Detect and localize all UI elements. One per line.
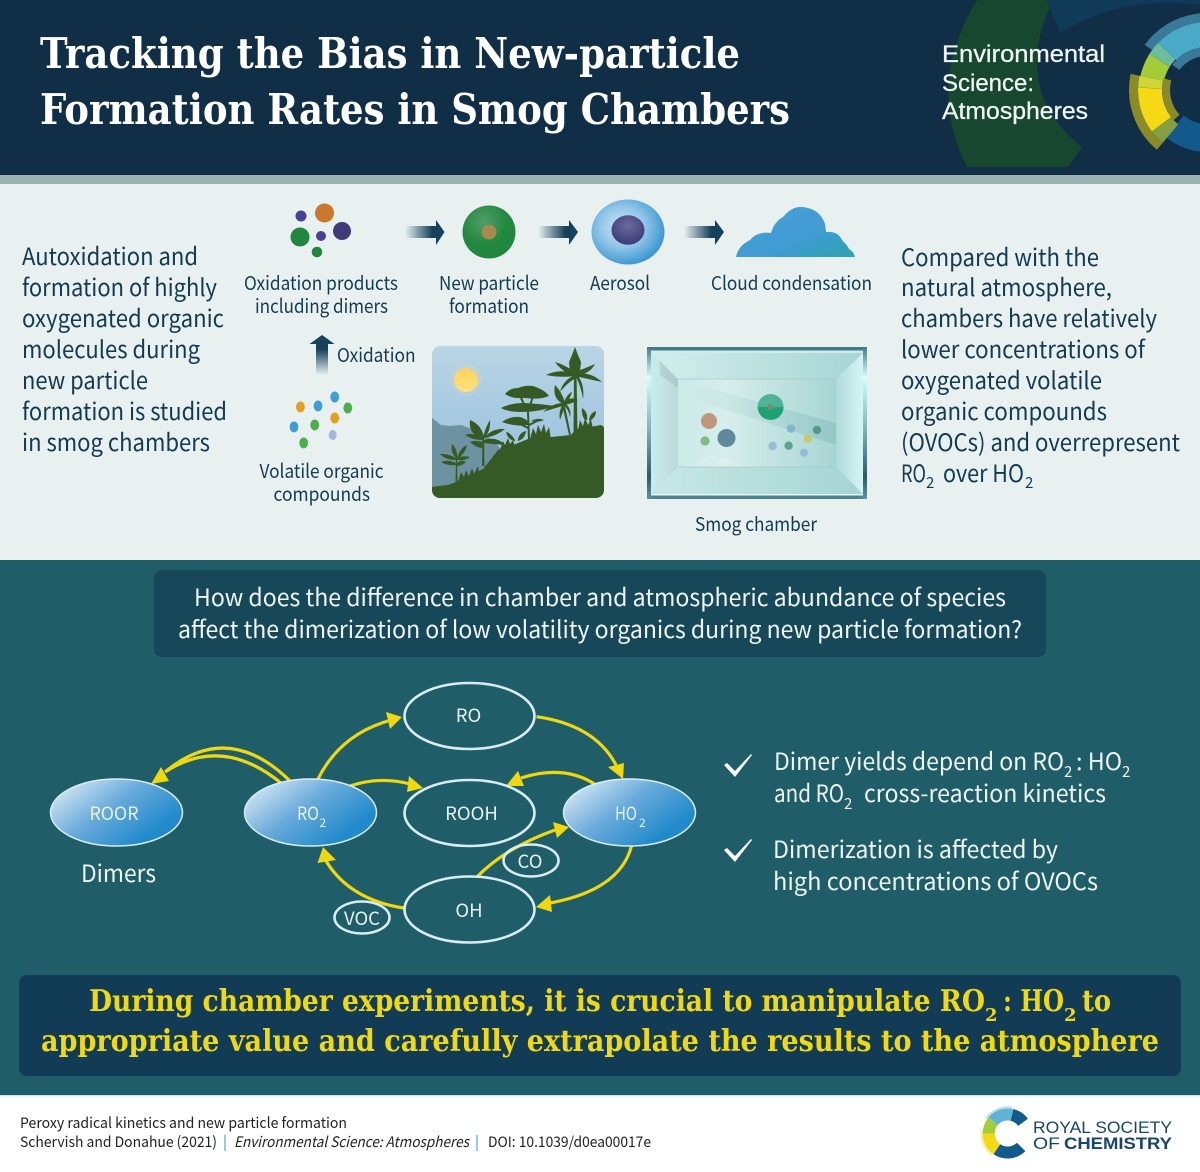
journal name: Environmental	[942, 41, 1105, 68]
node: RO2: 2	[320, 814, 326, 831]
icon: new particle	[462, 206, 516, 258]
title: Tracking the Bias in New-particle	[40, 29, 740, 78]
icon: volatile organic compounds	[290, 392, 352, 448]
left text block: molecules during	[22, 330, 200, 365]
conclusion box: During chamber experiments, it is crucial to manipulate RO	[89, 984, 985, 1019]
conclusion box: to	[1082, 984, 1111, 1019]
finding 1: cross-reaction kinetics	[864, 774, 1106, 809]
arrow: RO to HO2	[536, 717, 624, 779]
icon: check mark	[724, 754, 752, 777]
flow labels: Aerosol	[590, 269, 650, 296]
right text block: 2	[1025, 472, 1033, 493]
oxidation label: Oxidation	[337, 341, 416, 368]
arrow: OH to RO2	[318, 847, 404, 908]
finding 2: high concentrations of OVOCs	[773, 862, 1098, 897]
ground and vegetation	[432, 347, 604, 498]
citation: Environmental Science: Atmospheres	[234, 1131, 470, 1152]
reaction network diagram	[50, 683, 696, 942]
arrow: oxidation	[310, 335, 334, 375]
flow labels: Cloud condensation	[711, 269, 872, 296]
citation: Peroxy radical kinetics and new particle formation	[20, 1112, 347, 1133]
conclusion box: 2	[985, 1005, 998, 1026]
arrow: RO2 to ROOH	[350, 776, 423, 792]
left text block: new particle	[22, 361, 148, 396]
node: RO2	[244, 779, 376, 846]
right text block: Compared with the	[901, 238, 1099, 273]
node: ROOR	[50, 779, 182, 846]
node: CO	[504, 844, 558, 876]
voc label	[260, 457, 384, 507]
journal name: Science:	[942, 70, 1034, 97]
node: ROOH: ROOH	[445, 800, 498, 826]
node: OH	[404, 876, 534, 942]
header band	[0, 0, 1200, 194]
right text block	[901, 238, 1180, 493]
voc label: Volatile organic	[260, 457, 384, 484]
question box	[154, 570, 1046, 657]
node: HO2: 2	[639, 814, 646, 831]
right text block: organic compounds	[901, 392, 1107, 427]
flow labels: New particle	[439, 269, 539, 296]
citation: |	[223, 1131, 227, 1152]
node: CO: CO	[518, 848, 542, 874]
citation: |	[475, 1131, 479, 1152]
finding 2	[724, 830, 1098, 897]
right text block: lower concentrations of	[901, 330, 1146, 365]
node: ROOH	[404, 780, 534, 846]
panel: dimerization question and mechanism	[0, 560, 1200, 1095]
left text block: in smog chambers	[22, 423, 210, 458]
node: RO: RO	[456, 702, 481, 728]
arrow: RO2 to RO	[318, 712, 402, 779]
finding 1: 2	[1122, 761, 1130, 782]
finding 1	[724, 742, 1130, 814]
icon: aerosol	[592, 200, 664, 264]
decorative logo arcs	[948, 0, 1200, 167]
right text block: RO	[901, 454, 926, 489]
icon: Royal Society of Chemistry logo: OF	[1033, 1135, 1060, 1153]
flow labels: Oxidation products	[244, 269, 398, 296]
left text block: formation is studied	[22, 392, 227, 427]
left text block: Autoxidation and	[22, 237, 198, 272]
journal name	[942, 41, 1105, 125]
left text block: formation of highly	[22, 268, 217, 303]
right text block: natural atmosphere,	[901, 268, 1112, 303]
arrow: HO2 to OH	[536, 846, 632, 912]
icon: Royal Society of Chemistry logo: CHEMISTRY	[1064, 1135, 1172, 1153]
icon: cloud	[736, 207, 855, 257]
dimers label: Dimers	[81, 854, 156, 889]
right text block: oxygenated volatile	[901, 361, 1102, 396]
right text block: (OVOCs) and overrepresent	[901, 423, 1180, 458]
title	[40, 29, 790, 134]
arrow: RO2 to ROOR	[151, 748, 290, 784]
panel: atmosphere and chamber overview	[0, 184, 1200, 560]
voc label: compounds	[274, 480, 370, 507]
node: OH: OH	[455, 897, 483, 923]
hills	[432, 418, 500, 498]
finding 2: Dimerization is affected by	[773, 830, 1058, 865]
left text block	[22, 237, 227, 458]
citation	[20, 1112, 651, 1152]
finding 1: 2	[844, 793, 852, 814]
right text block: 2	[926, 472, 934, 493]
node: RO	[404, 683, 534, 749]
icon: Royal Society of Chemistry logo: ROYAL SOCIETY	[1033, 1119, 1172, 1137]
node: HO2: HO	[615, 800, 637, 826]
icon: oxidation product molecules	[290, 204, 351, 257]
left text block: oxygenated organic	[22, 299, 224, 334]
title: Formation Rates in Smog Chambers	[40, 85, 790, 134]
finding 1: Dimer yields depend on RO	[774, 742, 1064, 777]
arrow: aerosol to cloud	[684, 220, 724, 245]
smog chamber label: Smog chamber	[695, 510, 818, 537]
finding 1: : HO	[1076, 742, 1122, 777]
right text block: chambers have relatively	[901, 299, 1157, 334]
node: VOC	[334, 902, 390, 934]
flow labels: formation	[449, 292, 529, 319]
question box: affect the dimerization of low volatility organics during new particle formation?	[178, 610, 1022, 645]
citation: Schervish and Donahue (2021)	[20, 1131, 217, 1152]
node: HO2	[564, 779, 696, 846]
finding 1: and RO	[774, 774, 844, 809]
right text block: over HO	[943, 454, 1024, 489]
flow labels	[244, 269, 872, 319]
arrow: new particle to aerosol	[538, 220, 578, 245]
conclusion box	[19, 975, 1181, 1076]
question box: How does the difference in chamber and atmospheric abundance of species	[194, 578, 1006, 613]
citation: DOI: 10.1039/d0ea00017e	[488, 1131, 651, 1152]
illustration: rainforest atmosphere	[432, 346, 604, 498]
illustration: smog chamber	[647, 347, 867, 499]
node: VOC: VOC	[344, 905, 380, 931]
node: RO2: RO	[297, 800, 319, 826]
chamber particles	[700, 394, 821, 457]
conclusion box: 2	[1064, 1005, 1077, 1026]
arrow: products to new particle	[405, 220, 444, 245]
journal name: Atmospheres	[942, 98, 1088, 125]
flow labels: including dimers	[255, 292, 388, 319]
icon: journal logo ring	[1103, 0, 1200, 194]
sun	[454, 368, 478, 396]
finding 1: 2	[1064, 761, 1072, 782]
arrow: HO2 to ROOH	[506, 771, 596, 786]
footer	[0, 1095, 1200, 1172]
icon: Royal Society of Chemistry logo	[971, 1097, 1172, 1170]
conclusion box: : HO	[1003, 984, 1064, 1019]
node: ROOR: ROOR	[90, 800, 139, 826]
arrow: OH to HO2	[477, 822, 569, 877]
icon: check mark	[724, 839, 752, 862]
